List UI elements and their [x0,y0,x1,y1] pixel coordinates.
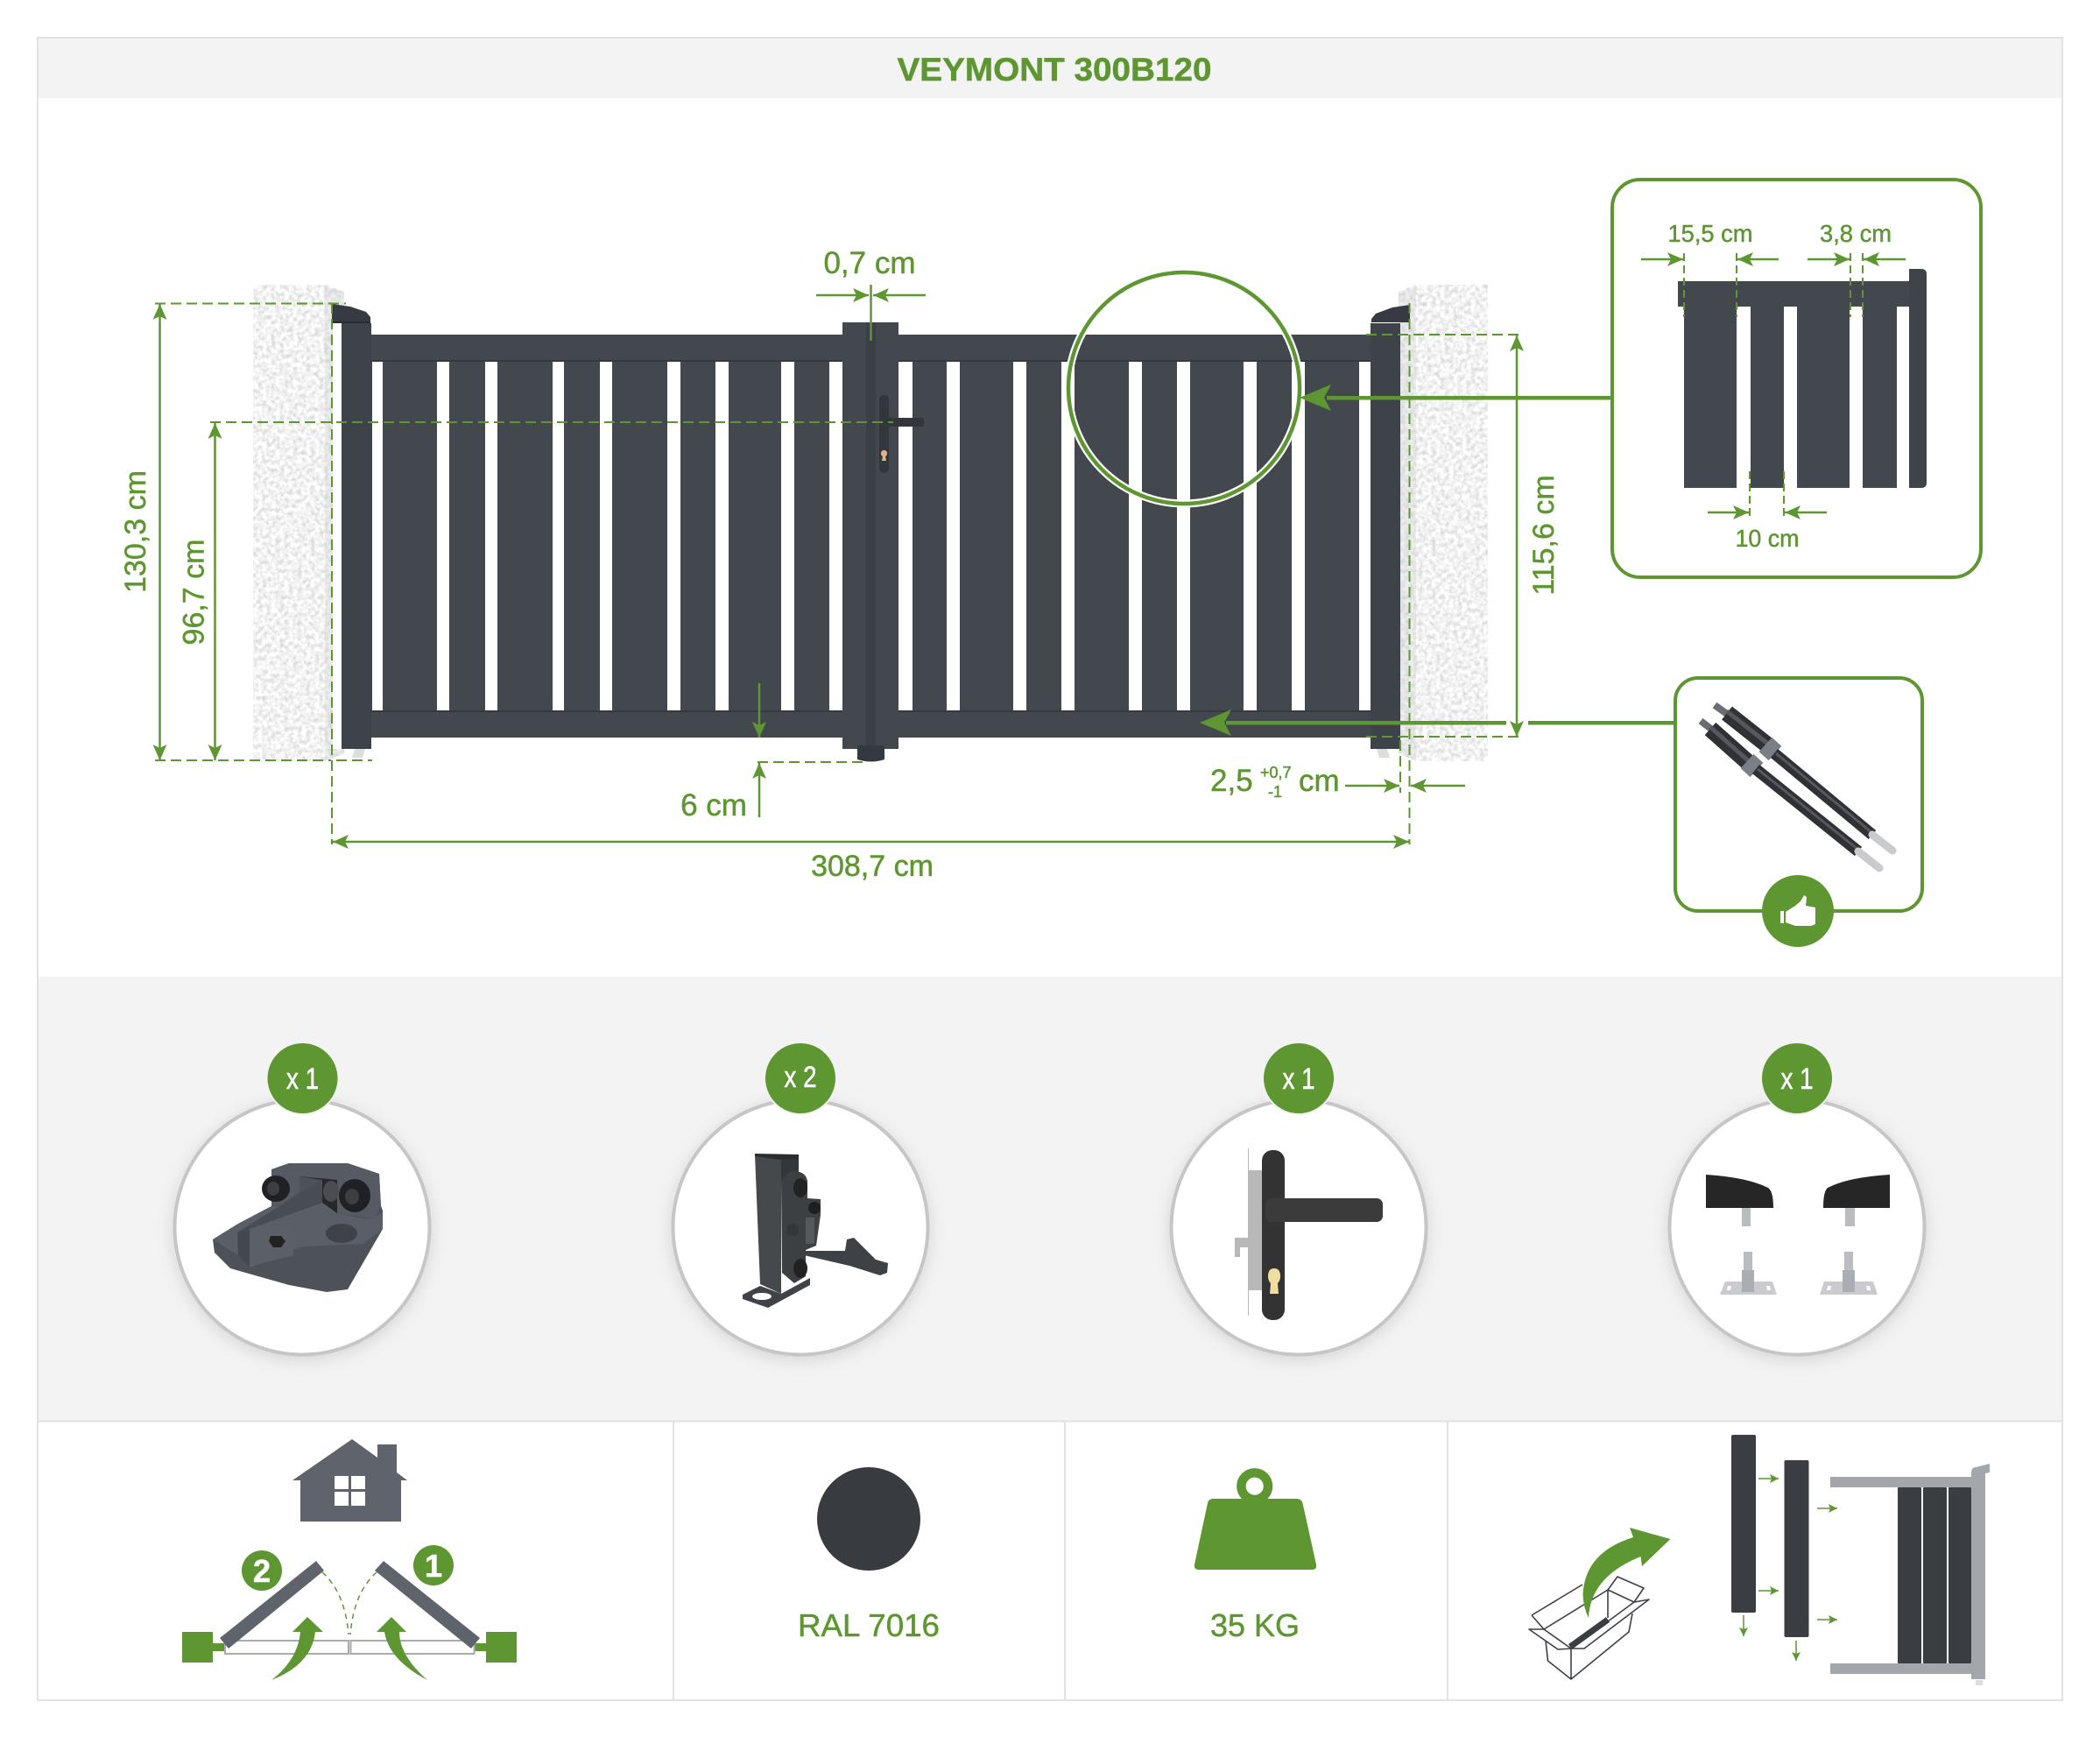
dimension labels [119,246,1561,883]
step 1 badge: 1 [425,1548,442,1584]
dimension labels: 308,7 cm [811,850,934,883]
dimension labels: 96,7 cm [177,540,210,645]
part: latch [743,1154,888,1308]
dimension labels: 2,5 [1210,764,1253,798]
panel: colour: RAL 7016 [798,1607,940,1643]
gate drawing [253,285,1488,762]
quantity badge [764,1041,837,1115]
icon: slat in box [1570,1620,1608,1647]
panel: weight: 35 KG [1210,1607,1300,1643]
part: handle and lock [1235,1148,1383,1320]
panel: slat detail: 3,8 cm [1820,220,1892,247]
icon: house [292,1439,407,1522]
quantity badge: x 1 [1781,1063,1813,1096]
icon: open leaves [220,1561,480,1649]
swing paths [322,1572,377,1635]
arrow to slat detail [1300,385,1612,411]
accessory 3: handle [1172,1041,1426,1354]
part: stops [1706,1175,1890,1295]
step 2 badge [242,1550,282,1591]
icon: closed gate and pillars [182,1632,517,1663]
quantity badge: x 1 [1282,1063,1315,1096]
door handle [879,395,924,473]
quantity badge [266,1041,340,1115]
dimension lines [155,285,1521,844]
left post and cap [332,304,371,758]
panel: opening order [182,1439,517,1680]
icon: open box [1529,1577,1649,1679]
panel: slat detail: 10 cm [1736,525,1799,552]
title bar: VEYMONT 300B120 [897,52,1212,88]
dimension labels: +0,7 [1260,764,1292,781]
panel: slat detail: 15,5 cm [1667,220,1753,247]
dimension labels: 6 cm [680,788,747,823]
dimension labels: 0,7 cm [823,246,916,280]
step 1 badge [413,1545,454,1585]
motor arms [1701,705,1892,868]
panel: colour [798,1467,940,1643]
accessory 1: gate stop [175,1041,429,1354]
gate panel [368,335,1374,738]
gray accessories band [39,977,2061,1422]
right pillar [1399,285,1488,761]
accessory 4: leaf stops [1669,1041,1925,1354]
dimension labels: cm [1299,764,1340,798]
loose slats [1731,1435,1809,1637]
accessory 2: holding latch [673,1041,928,1354]
panel: motor [1675,678,1922,911]
panel: weight [1194,1472,1316,1643]
part: central stop [213,1163,383,1292]
gate frame [1830,1464,1990,1685]
panel: assembly [1529,1435,1990,1685]
icon: thumbs up badge [1762,875,1834,947]
dimension labels: -1 [1268,783,1282,801]
step 2 badge: 2 [253,1553,271,1589]
bottom row dividers [39,1421,2061,1699]
arrow to motor [1200,710,1675,736]
quantity badge: x 1 [286,1063,319,1096]
dimension labels: 130,3 cm [119,470,152,593]
installed slats [1898,1487,1971,1663]
dimension labels: 115,6 cm [1527,475,1561,596]
central door post [842,322,898,762]
panel: slat detail [1612,180,1981,577]
insertion arrows [1744,1479,1837,1661]
left pillar [253,285,344,761]
title bar [39,39,2061,98]
quantity badge [1760,1041,1834,1115]
unpack arrow [1583,1528,1671,1618]
right post and cap [1371,305,1410,758]
quantity badge: x 2 [785,1061,816,1094]
quantity badge [1262,1041,1335,1115]
detail magnifier circle [1066,270,1302,506]
opening arrows [271,1617,427,1680]
